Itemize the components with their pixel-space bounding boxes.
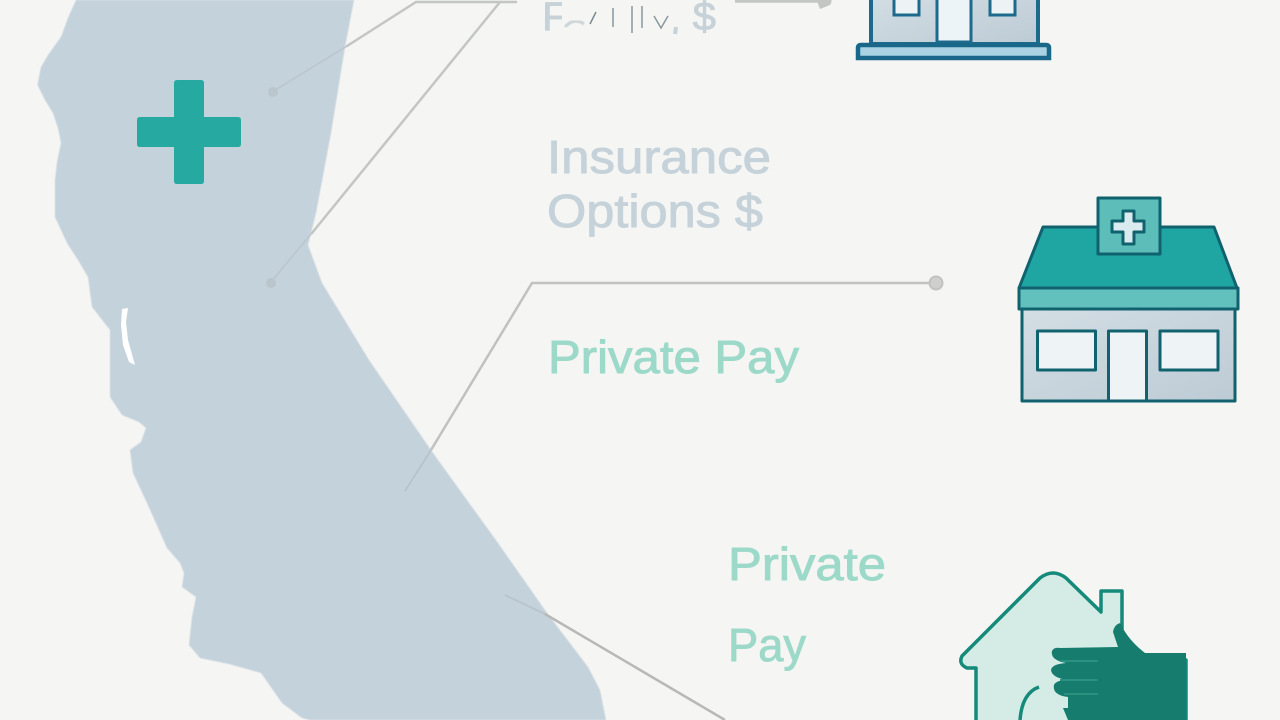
clinic roof (1019, 227, 1237, 288)
icon: facility building (858, 0, 1049, 58)
clinic sign (1098, 198, 1160, 254)
icon: house with helping hand (961, 573, 1186, 720)
label: Insurance Options $: Options $ (547, 185, 763, 237)
arrow: facility to building (735, 0, 832, 9)
connector: facility to upper map (268, 2, 516, 97)
label: Private Pay (lower): Pay (728, 619, 806, 671)
clinic body (1022, 309, 1235, 401)
clinic roof band (1019, 288, 1238, 309)
connector: to clinic (405, 276, 942, 491)
connector: facility to lower map (266, 2, 500, 288)
label: Private Pay (lower): Private (728, 538, 886, 590)
clinic door (1108, 331, 1146, 401)
icon: medical cross on map (137, 80, 241, 184)
map of California (38, 0, 606, 720)
clinic windows (1038, 331, 1218, 370)
label: Insurance Options $: Insurance (547, 131, 771, 183)
clinic sign cross (1112, 211, 1144, 244)
icon: clinic building (1019, 198, 1238, 401)
label: Insurance Options $ (547, 131, 771, 237)
connector: to private pay house (505, 595, 725, 720)
label: Private Pay (centre): Private Pay (548, 331, 799, 383)
icon: inlet in the coast (121, 308, 135, 365)
label: Private Pay (lower) (728, 538, 886, 671)
